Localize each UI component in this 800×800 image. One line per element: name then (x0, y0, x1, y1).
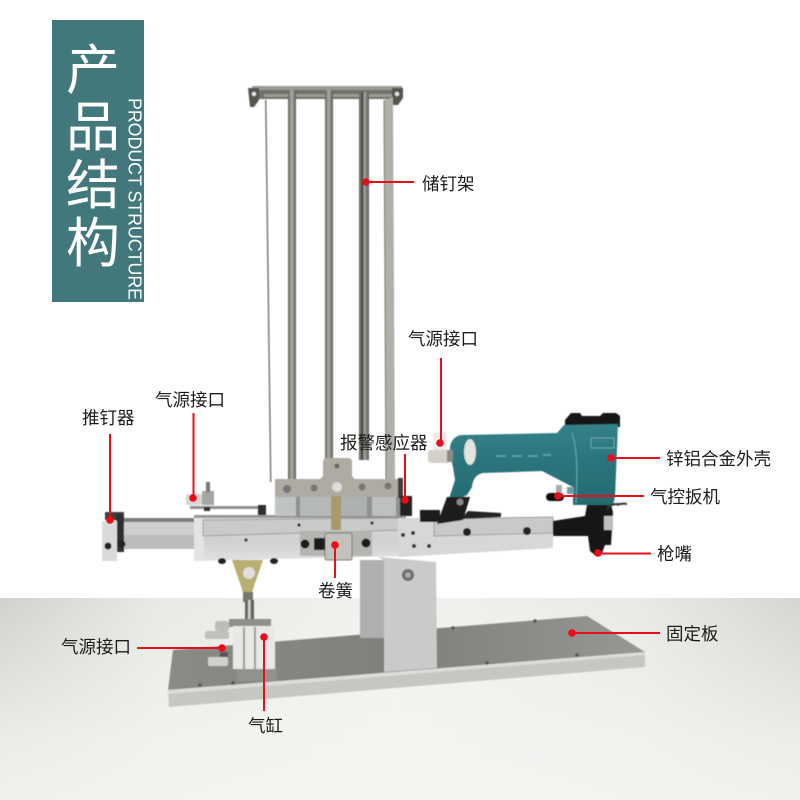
title: english vertical subtitle: PRODUCT STRUCTURE (124, 98, 146, 300)
callout: 枪嘴: 枪嘴 (657, 544, 692, 564)
callout: 气控扳机: 气控扳机 (650, 487, 720, 507)
callout: 气源接口 top (408, 329, 478, 447)
base plate (168, 616, 645, 707)
right rail (398, 517, 553, 557)
callout: 固定板: 固定板 (666, 624, 718, 644)
callout: 气源接口 left (155, 390, 225, 502)
callout: 气控扳机 (554, 487, 720, 507)
trigger (546, 493, 564, 501)
title: chinese heading (66, 41, 120, 274)
callout: 报警感应器 (340, 433, 428, 504)
callout: 卷簧: 卷簧 (318, 581, 353, 601)
callout: 气源接口 lower: 气源接口 (61, 637, 131, 657)
callout: 锌铝合金外壳 (607, 449, 771, 469)
gun nose (553, 505, 613, 556)
callout: 推钉器: 推钉器 (82, 408, 134, 428)
callout: 储钉架 (362, 174, 474, 194)
callout: 枪嘴 (594, 544, 692, 564)
air cylinder (205, 619, 277, 681)
title: chinese heading: 结 (66, 156, 120, 216)
callout: 气源接口 top: 气源接口 (408, 329, 478, 349)
machine illustration (102, 86, 645, 707)
title: chinese heading: 产 (66, 41, 120, 101)
callout: 储钉架: 储钉架 (422, 174, 474, 194)
callout: 气源接口 lower (61, 637, 226, 657)
gun head cap (565, 413, 620, 427)
spring housing (300, 531, 372, 560)
gun body (447, 424, 618, 505)
left pusher cylinder (102, 512, 196, 561)
floor background (0, 598, 800, 800)
callout: 固定板 (568, 624, 718, 644)
gun bracket (437, 497, 470, 524)
storage rack (248, 86, 403, 482)
title: chinese heading: 构 (66, 214, 120, 274)
callout: 报警感应器: 报警感应器 (340, 433, 428, 453)
callout: 气缸: 气缸 (248, 716, 283, 736)
callout: 推钉器 (82, 408, 134, 524)
nail gun (420, 413, 627, 556)
callout: 气缸 (248, 633, 283, 736)
callout: 锌铝合金外壳: 锌铝合金外壳 (666, 449, 771, 469)
callout: 卷簧 (318, 541, 353, 601)
callout: 气源接口 left: 气源接口 (155, 390, 225, 410)
title: chinese heading: 品 (66, 98, 120, 158)
staple holder (275, 458, 412, 530)
panel: title banner (52, 20, 146, 302)
left air fitting and bar (186, 482, 266, 518)
main rail (194, 515, 406, 564)
air inlet fitting (433, 432, 447, 452)
rear column (360, 557, 437, 672)
yoke and piston rod (232, 560, 263, 626)
